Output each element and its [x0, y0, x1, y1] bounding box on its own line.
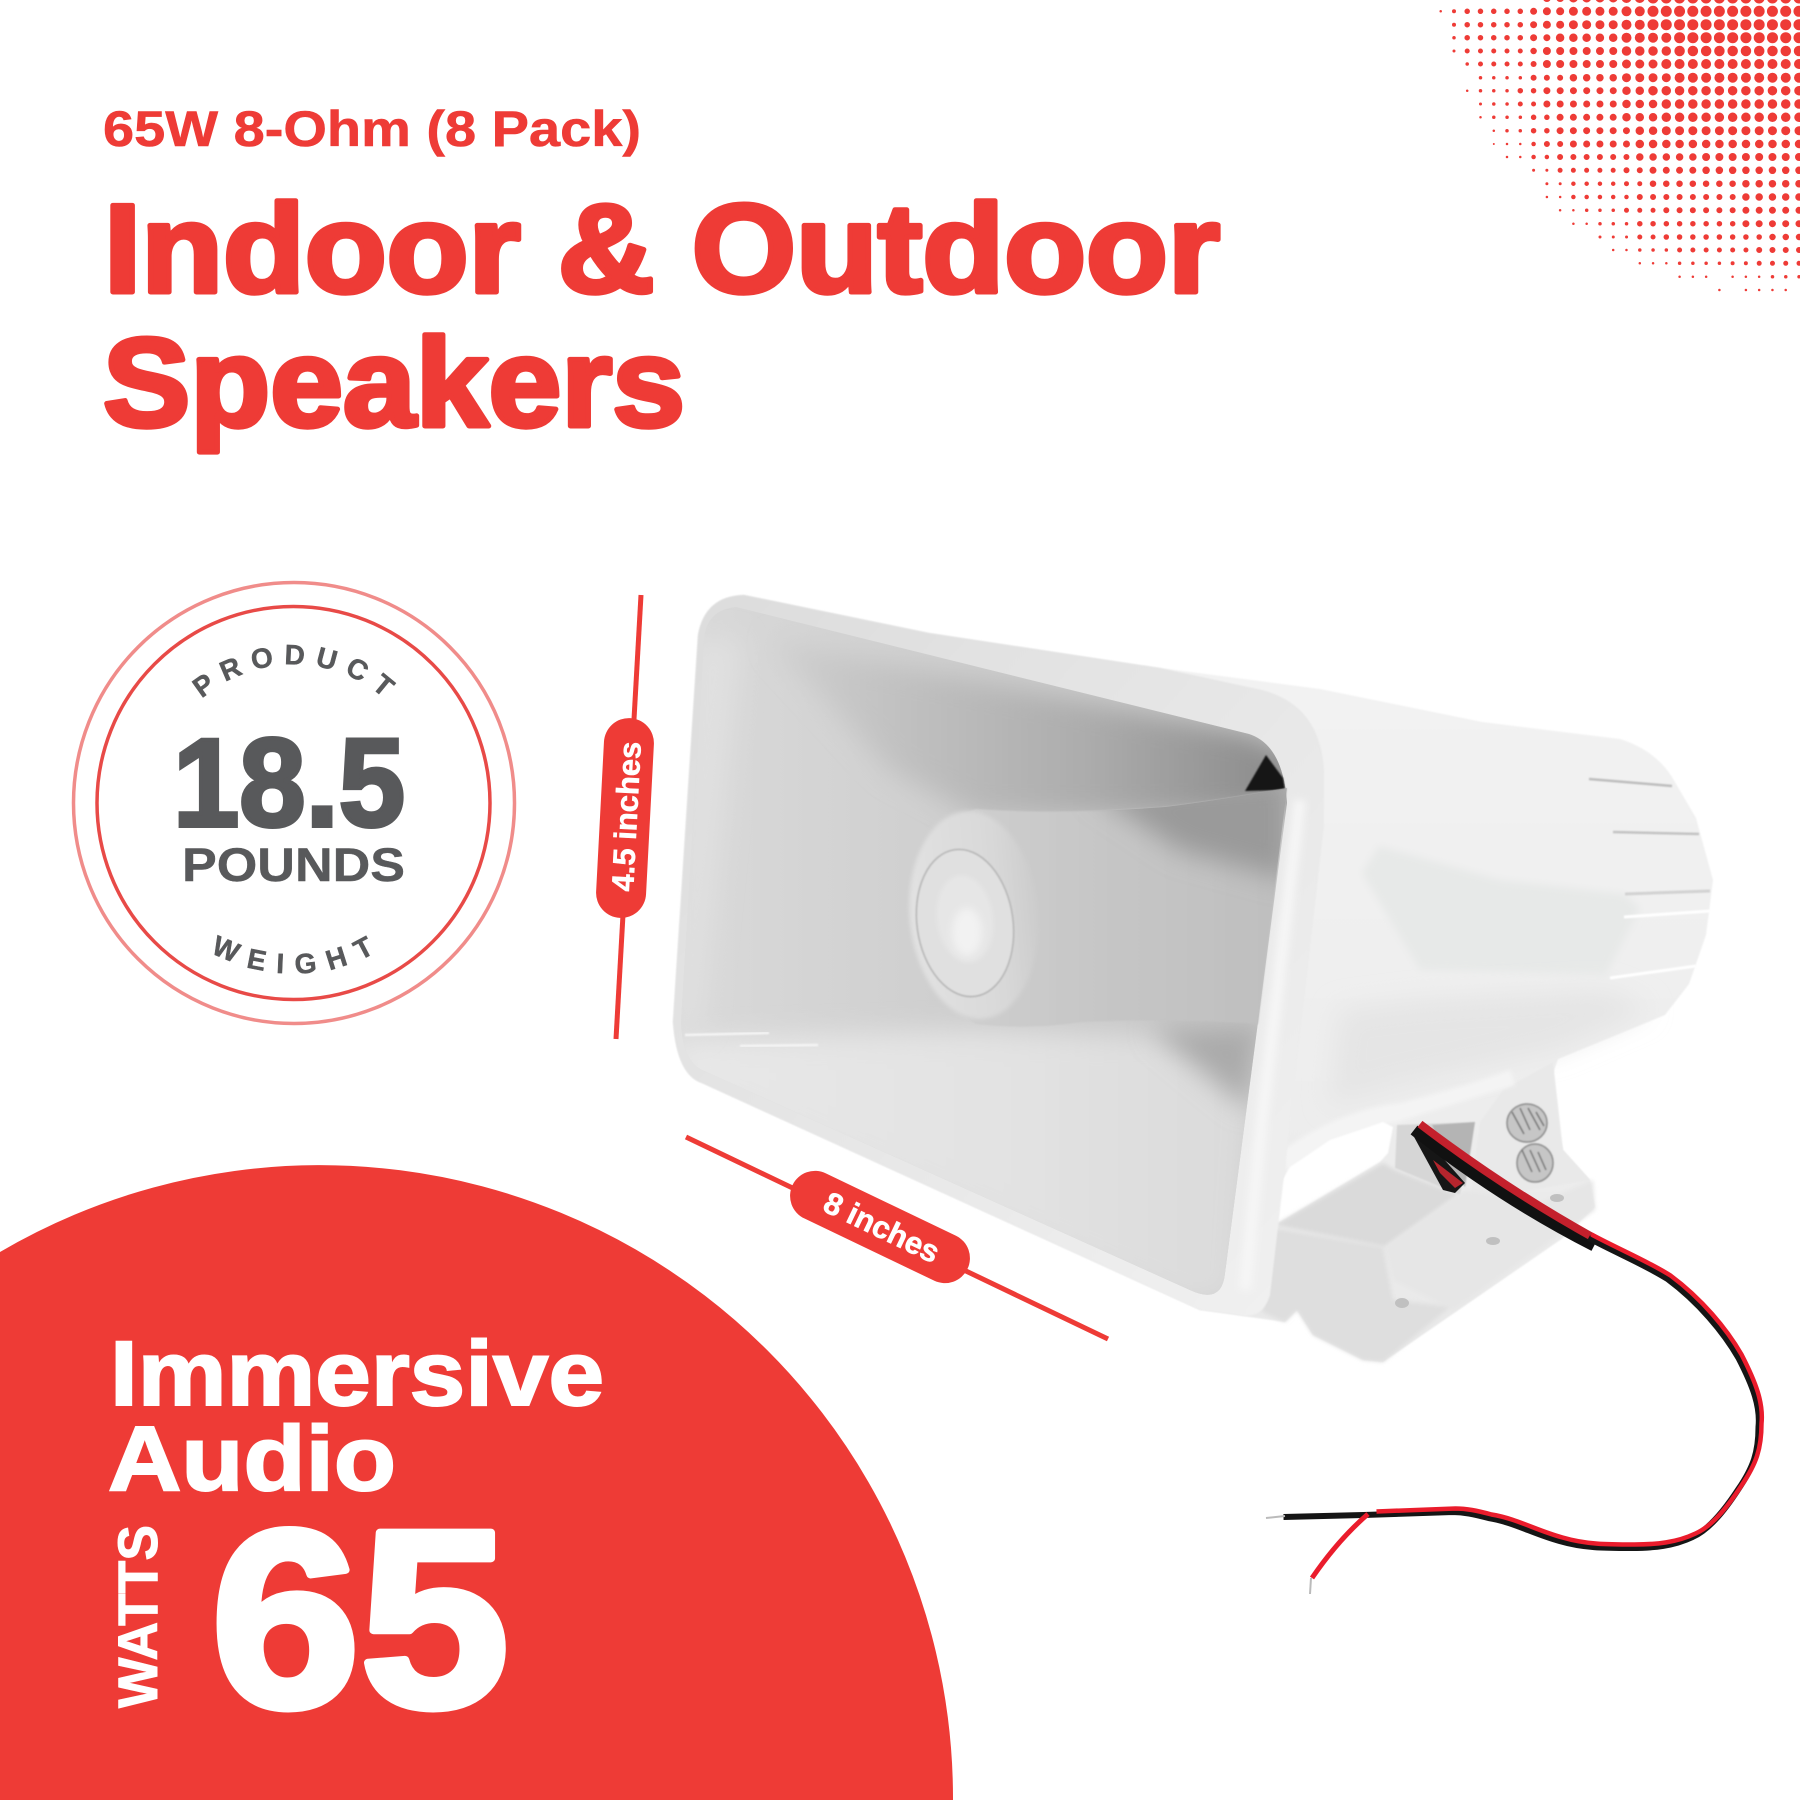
bolts — [1507, 1104, 1553, 1182]
driver outer lip — [901, 806, 1047, 1024]
mounting screw holes — [1395, 1194, 1564, 1308]
halftone dot pattern — [1441, 0, 1800, 290]
red conductor — [1376, 1234, 1762, 1544]
base raised right block — [1385, 1180, 1595, 1310]
tube upper shadow — [1104, 788, 1287, 884]
width dimension: 8 inches — [686, 1137, 1108, 1339]
body shaded facet — [1362, 846, 1640, 975]
heading: immersive: Immersive — [110, 1323, 604, 1425]
heading: audio: Audio — [108, 1408, 396, 1510]
horn cavity — [705, 614, 1287, 1295]
window under the horn — [1270, 1122, 1393, 1223]
dark gap in horn — [1245, 755, 1285, 791]
badge unit: POUNDS — [182, 838, 405, 891]
mounting bracket blocks — [1395, 1122, 1475, 1195]
value: 65: 65 — [211, 1479, 509, 1760]
cavity base wall — [708, 616, 1287, 1295]
split red conductor — [1312, 1514, 1368, 1578]
subtitle: 65W 8-Ohm (8 Pack) — [103, 101, 641, 157]
title: Indoor & Outdoor — [104, 178, 1220, 319]
height dimension: 4.5 inches: 4.5 inches — [605, 741, 648, 892]
panel text: immersive audio 65 watts — [106, 1323, 604, 1760]
back cylinder ridges — [1589, 779, 1710, 978]
cavity upper dark wedge — [812, 660, 1287, 820]
rim highlight edge — [1245, 800, 1300, 1290]
base sloped top face — [1275, 1163, 1458, 1247]
red quarter circle panel — [0, 1165, 953, 1800]
bracket stalk — [1470, 1062, 1590, 1200]
height dimension: 4.5 inches — [595, 595, 655, 1039]
badge label: product: PRODUCT — [192, 644, 396, 698]
black conductor — [1284, 1238, 1759, 1548]
speaker body silhouette — [673, 595, 1713, 1362]
unit: watts: WATTS — [106, 1525, 169, 1708]
lower wire loop in bracket — [1413, 1135, 1465, 1193]
driver inner ring — [907, 843, 1023, 1003]
rim reflections — [685, 1033, 818, 1046]
driver cone — [931, 872, 999, 966]
speaker wire — [1266, 1124, 1762, 1594]
badge value: 18.5 — [173, 714, 405, 853]
cavity lower light panel — [670, 1030, 1258, 1310]
title: Speakers — [103, 312, 685, 453]
badge: product weight — [72, 580, 516, 1026]
badge label: weight: WEIGHT — [214, 934, 370, 974]
title — [103, 178, 1220, 453]
base lower left block — [1262, 1228, 1450, 1362]
left wall light — [675, 640, 740, 1030]
shadow under driver — [1150, 1024, 1262, 1110]
front rim — [673, 595, 1324, 1316]
lower body shade — [1330, 990, 1650, 1105]
driver tube — [975, 788, 1288, 1026]
bare wire tips — [1266, 1516, 1311, 1594]
speaker product illustration — [670, 595, 1762, 1594]
width dimension: 8 inches: 8 inches — [818, 1185, 945, 1270]
arch rib — [1283, 1070, 1515, 1175]
wire sheath — [1414, 1124, 1594, 1246]
